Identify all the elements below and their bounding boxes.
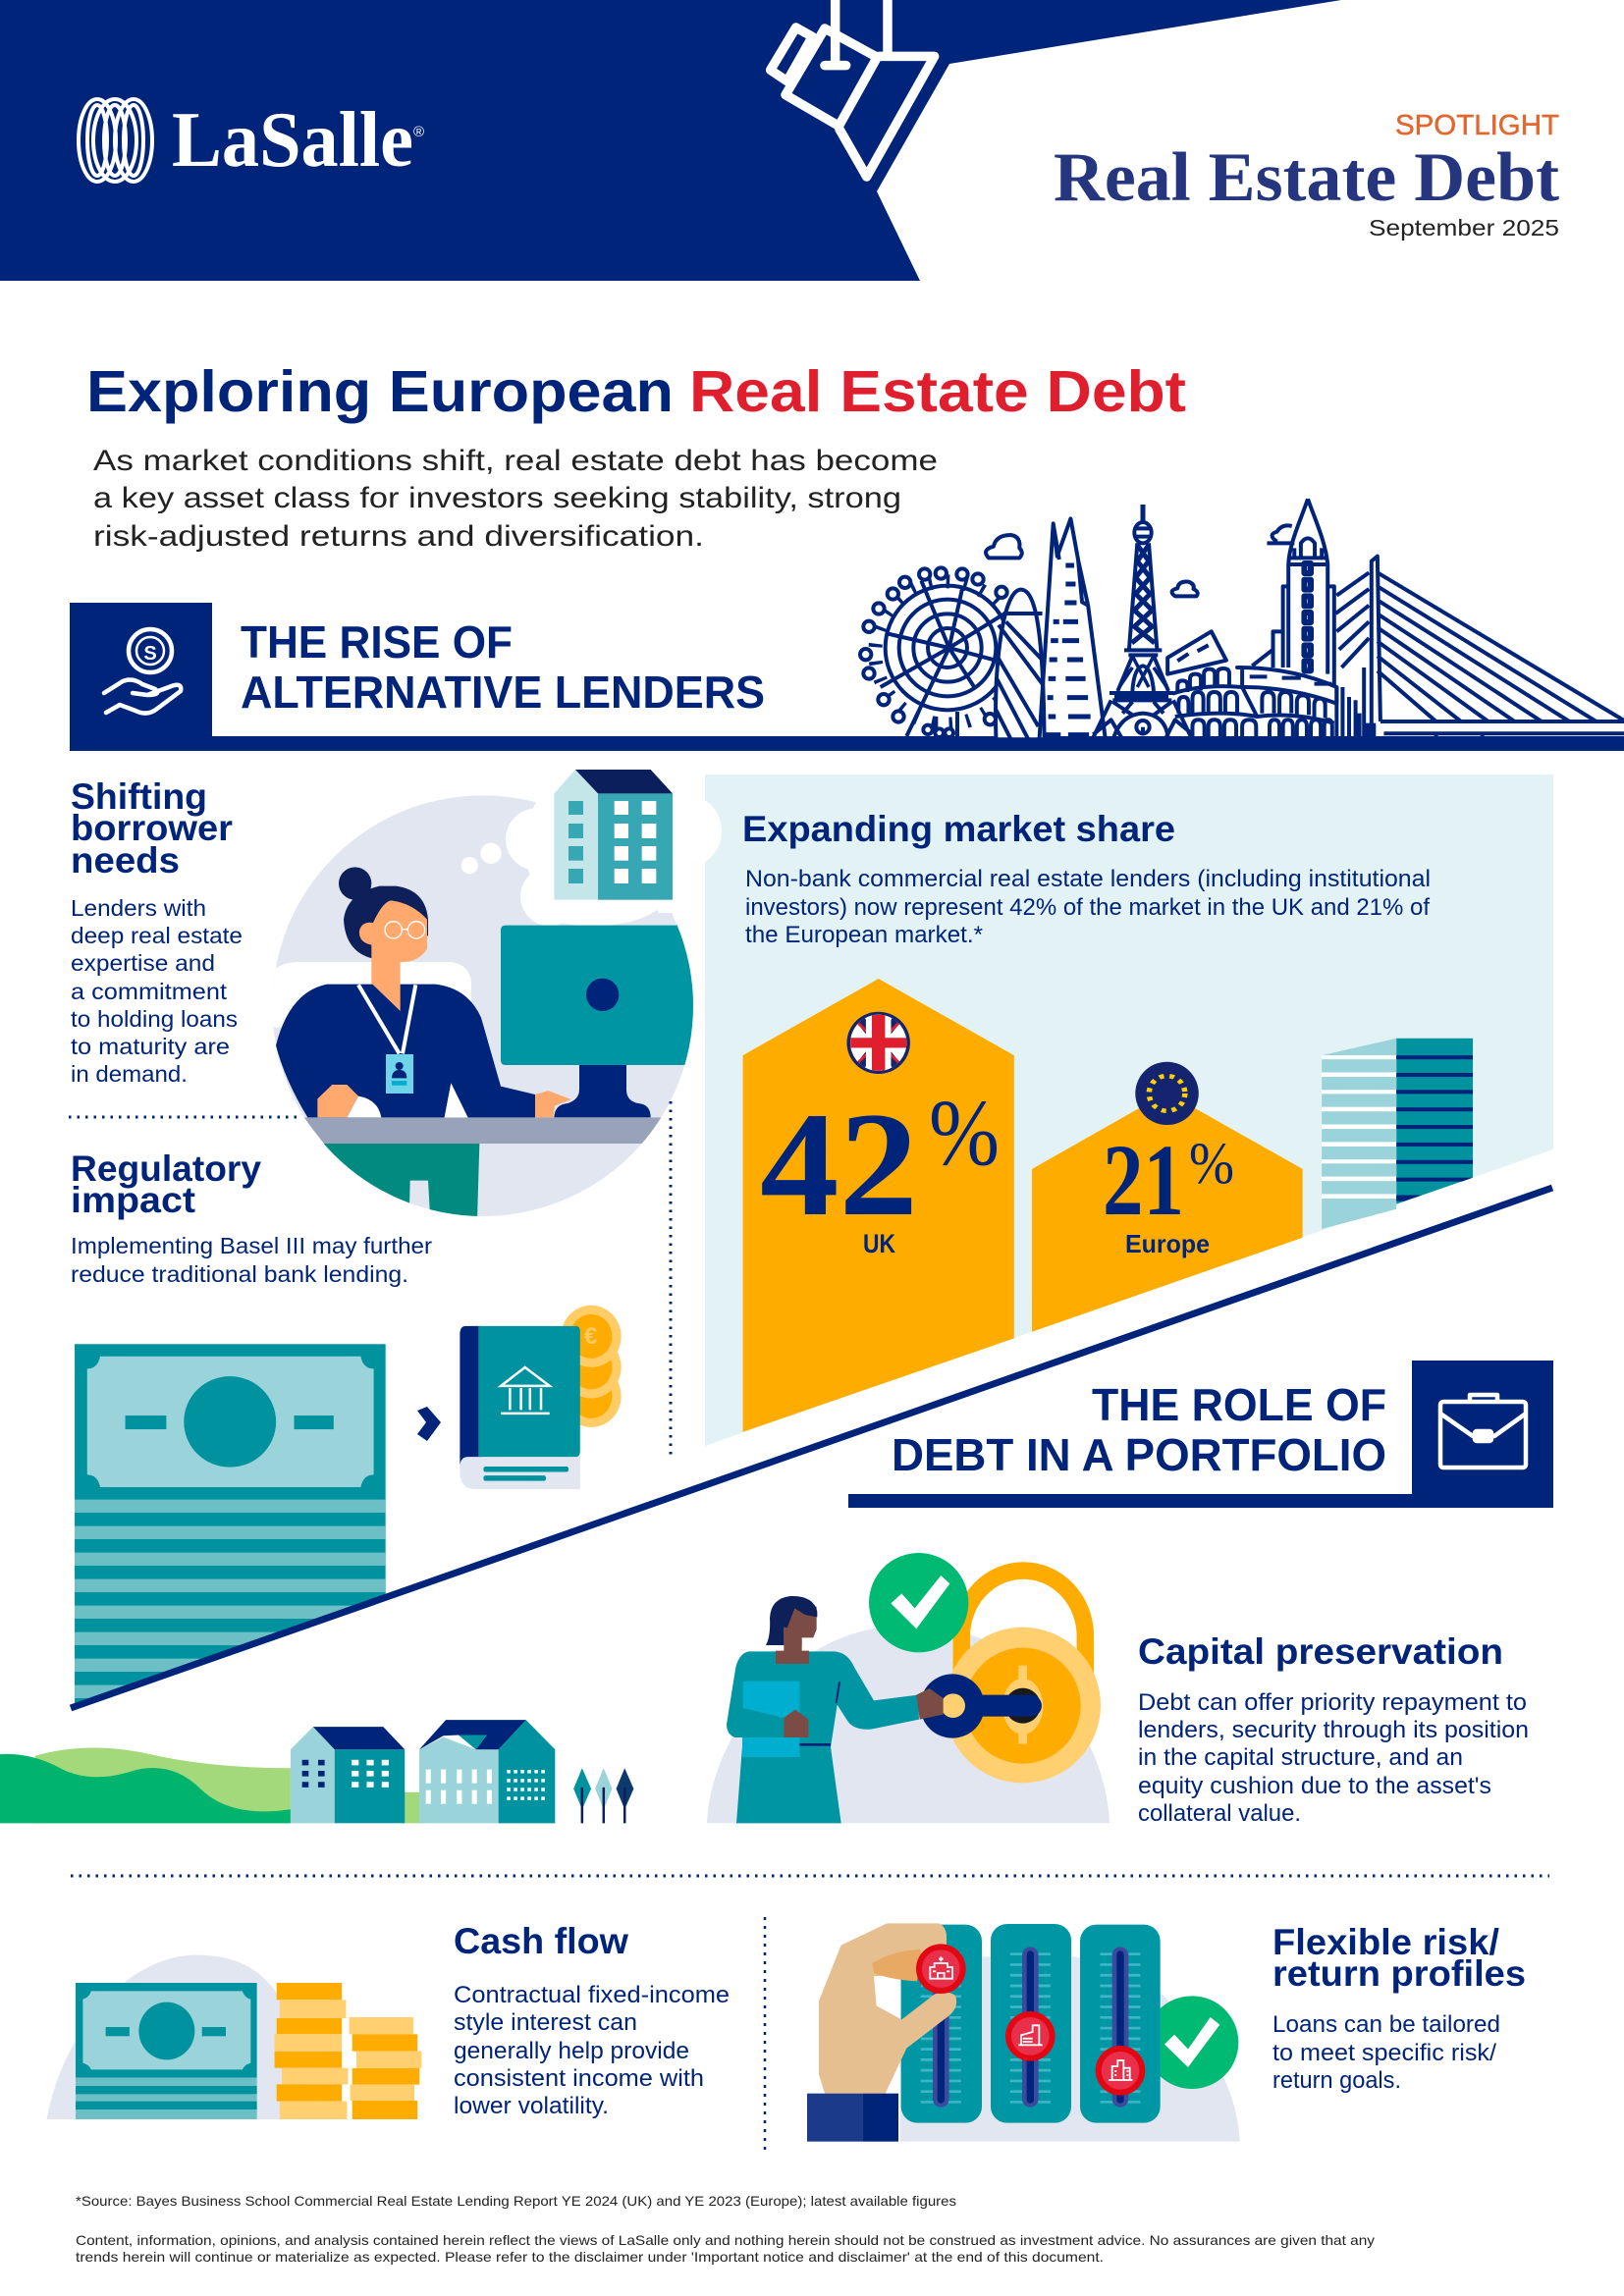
- illustration: capital preservation, woman with key: [707, 1553, 1110, 1823]
- panel heading: Expanding market share: [742, 809, 1175, 849]
- padlock: [945, 1571, 1101, 1783]
- illustration: coins and bank book: €: [584, 1323, 597, 1350]
- text block: shifting borrower needs: expertise and: [71, 950, 215, 976]
- banknotes: [76, 1983, 257, 2119]
- footnotes: Content, information, opinions, and analysis contained herein reflect the views of LaSalle only and nothing herein should not be construed as investment advice. No assurances are given that any: [76, 2232, 1375, 2248]
- intro text: [93, 445, 938, 553]
- text block: regulatory impact: [71, 1148, 432, 1287]
- illustration: cash and coin stacks: [46, 1955, 421, 2119]
- text block: flexible risk/return profiles: Flexible risk/: [1272, 1922, 1499, 1962]
- icon: hand holding coin: [104, 629, 181, 714]
- publication title: SPOTLIGHT: [1395, 110, 1559, 141]
- text block: shifting borrower needs: in demand.: [71, 1061, 188, 1087]
- intro text: As market conditions shift, real estate debt has become: [93, 445, 938, 477]
- slider knobs: [916, 1944, 1145, 2096]
- stat: 42% UK: 42: [760, 1082, 918, 1247]
- text block: shifting borrower needs: [71, 776, 243, 1087]
- footnotes: trends herein will continue or materialize as expected. Please refer to the disclaimer under 'Important notice and disclaimer' at the end of this document.: [76, 2249, 1104, 2265]
- text block: cash flow: consistent income with: [454, 2065, 704, 2092]
- text block: shifting borrower needs: Lenders with: [71, 895, 206, 921]
- text block: capital preservation: collateral value.: [1138, 1800, 1301, 1827]
- section header: the role of debt in a portfolio: THE ROLE OF: [1092, 1379, 1386, 1430]
- illustration: banknote stack: [75, 1344, 386, 1720]
- stat: 42% UK: [760, 1080, 1000, 1258]
- text block: shifting borrower needs: needs: [71, 840, 180, 881]
- text block: capital preservation: lenders, security through its position: [1138, 1717, 1529, 1743]
- stat: 21% Europe: [1103, 1124, 1234, 1258]
- stat: 21% Europe: 21: [1103, 1124, 1184, 1237]
- illustration: woman at computer: [265, 764, 724, 1220]
- cable-stayed bridge: [1335, 557, 1624, 739]
- panel body text: investors) now represent 42% of the market in the UK and 21% of: [745, 894, 1430, 921]
- desk: [303, 1117, 663, 1144]
- text block: cash flow: lower volatility.: [454, 2093, 609, 2119]
- building in thought cloud: [554, 770, 673, 900]
- footnotes: *Source: Bayes Business School Commercial Real Estate Lending Report YE 2024 (UK) and YE 2023 (Europe); latest available figures: [76, 2193, 956, 2209]
- computer monitor: [501, 925, 693, 1117]
- icon: briefcase: [1440, 1395, 1526, 1468]
- ferris wheel: [860, 567, 1018, 737]
- intro text: risk-adjusted returns and diversification.: [93, 520, 704, 553]
- icon: hanging folder: [771, 0, 935, 177]
- panel body text: the European market.*: [745, 922, 983, 948]
- trees: [573, 1768, 633, 1823]
- text block: shifting borrower needs: a commitment: [71, 979, 228, 1004]
- divider: horizontal dotted: [69, 1115, 302, 1119]
- stat: 21% Europe: Europe: [1125, 1229, 1210, 1258]
- panel: expanding market share: [705, 774, 1553, 1446]
- section header: the rise of alternative lenders: [70, 603, 1624, 751]
- legs: [324, 1144, 479, 1220]
- panel body text: [745, 866, 1431, 948]
- main heading: [86, 359, 1186, 424]
- logo: ®: [413, 124, 424, 140]
- illustration: European skyline: [860, 499, 1624, 741]
- text block: cash flow: [454, 1921, 730, 2119]
- coins: [561, 1306, 622, 1427]
- coin stacks: [275, 1983, 421, 2119]
- key: [920, 1674, 1042, 1738]
- arrow: chevron: [417, 1407, 441, 1441]
- text block: capital preservation: equity cushion due to the asset's: [1138, 1773, 1491, 1799]
- building: striped tower: [1322, 1039, 1473, 1229]
- woman figure: [276, 867, 571, 1117]
- divider: lower vertical dotted: [764, 1917, 766, 2150]
- text block: shifting borrower needs: to maturity are: [71, 1034, 230, 1059]
- text block: flexible risk/return profiles: return goals.: [1272, 2067, 1401, 2094]
- logo: LaSalle: [172, 97, 413, 184]
- text block: capital preservation: Debt can offer priority repayment to: [1138, 1689, 1527, 1716]
- woman figure: [727, 1596, 944, 1823]
- house: Europe 21%: [1032, 1093, 1303, 1332]
- text block: flexible risk/return profiles: Loans can be tailored: [1272, 2011, 1500, 2038]
- illustration: sliders and hand: [807, 1923, 1240, 2142]
- text block: flexible risk/return profiles: to meet specific risk/: [1272, 2040, 1496, 2066]
- divider: lower dotted: [71, 1875, 1549, 1877]
- text block: shifting borrower needs: borrower: [71, 808, 233, 848]
- intro text: a key asset class for investors seeking stability, strong: [93, 482, 901, 514]
- thought cloud: [461, 764, 722, 926]
- footnotes: [76, 2193, 1375, 2265]
- text block: regulatory impact: impact: [71, 1180, 195, 1220]
- text block: flexible risk/return profiles: return profiles: [1272, 1953, 1526, 1994]
- text block: cash flow: style interest can: [454, 2009, 637, 2036]
- header banner: [0, 0, 1341, 281]
- slider panels: [901, 1924, 1161, 2123]
- stat: 42% UK: UK: [863, 1229, 895, 1258]
- text block: capital preservation: [1138, 1631, 1529, 1827]
- book: [460, 1326, 580, 1489]
- check badge: [1146, 1996, 1238, 2089]
- text block: cash flow: Contractual fixed-income: [454, 1982, 730, 2008]
- section header: the rise of alternative lenders: ALTERNATIVE LENDERS: [241, 667, 765, 718]
- illustration: coins and bank book: [460, 1306, 622, 1489]
- icon: EU flag: [1135, 1062, 1199, 1125]
- text block: regulatory impact: reduce traditional bank lending.: [71, 1261, 408, 1287]
- section header: the role of debt in a portfolio: [848, 1361, 1553, 1508]
- illustration: hills and houses: [0, 1720, 633, 1823]
- icon: UK flag: [846, 1012, 910, 1074]
- text block: shifting borrower needs: to holding loans: [71, 1006, 238, 1032]
- section header: the rise of alternative lenders: THE RISE OF: [241, 616, 513, 667]
- house 2: [419, 1720, 555, 1823]
- publication title: [1054, 110, 1559, 240]
- diagonal navy divider: [71, 1188, 1552, 1708]
- text block: regulatory impact: Implementing Basel III may further: [71, 1233, 432, 1258]
- gherkin: [996, 590, 1045, 739]
- divider: vertical dotted: [670, 1101, 672, 1455]
- check badge: [869, 1553, 968, 1652]
- id badge: [386, 1054, 413, 1094]
- tall tower: [1252, 499, 1334, 687]
- house 1: [291, 1727, 405, 1823]
- house: UK 42%: [743, 979, 1014, 1432]
- text block: flexible risk/return profiles: [1272, 1922, 1526, 2094]
- publication title: Real Estate Debt: [1054, 139, 1559, 216]
- chair back: [265, 962, 471, 1028]
- hand: [807, 1923, 956, 2142]
- publication title: September 2025: [1369, 215, 1559, 240]
- text block: regulatory impact: Regulatory: [71, 1148, 261, 1189]
- panel body text: Non-bank commercial real estate lenders (including institutional: [745, 866, 1431, 892]
- section header: the rise of alternative lenders: S: [143, 643, 157, 665]
- clouds: [986, 525, 1294, 596]
- main heading: Real Estate Debt: [689, 359, 1186, 424]
- section header: the role of debt in a portfolio: DEBT IN A PORTFOLIO: [892, 1429, 1386, 1480]
- eiffel tower: [1092, 505, 1193, 741]
- main heading: Exploring European: [86, 359, 674, 424]
- text block: shifting borrower needs: deep real estate: [71, 923, 243, 948]
- text block: shifting borrower needs: Shifting: [71, 776, 207, 817]
- text block: cash flow: Cash flow: [454, 1921, 628, 1961]
- icon: bank: [501, 1367, 550, 1414]
- text block: cash flow: generally help provide: [454, 2038, 689, 2064]
- text block: capital preservation: in the capital structure, and an: [1138, 1744, 1463, 1771]
- stat: 21% Europe: %: [1189, 1131, 1234, 1196]
- chart: market share houses: [743, 979, 1473, 1432]
- shard: [1040, 518, 1106, 739]
- colosseum: [1167, 631, 1336, 723]
- stat: 42% UK: %: [929, 1080, 1000, 1185]
- text block: capital preservation: Capital preservation: [1138, 1631, 1503, 1672]
